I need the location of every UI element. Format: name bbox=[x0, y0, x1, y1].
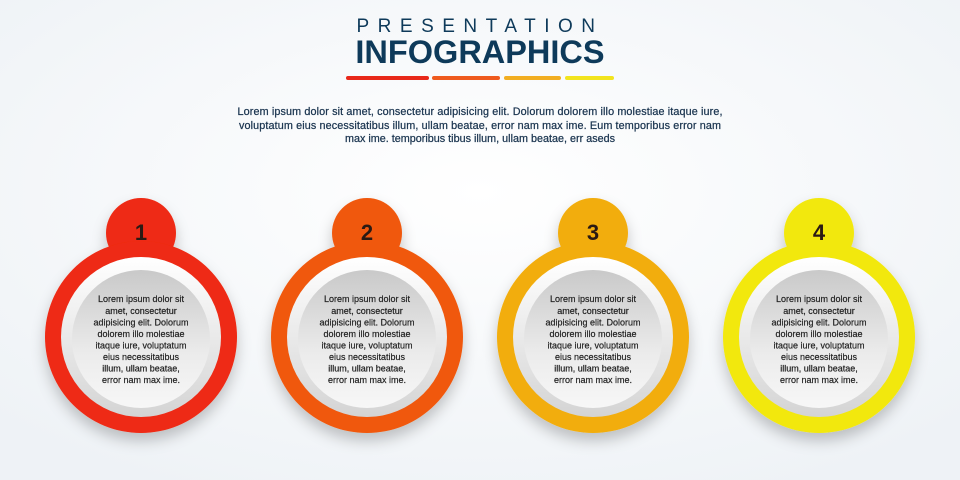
step 3: dolorem illo molestiae bbox=[549, 329, 637, 339]
step 2: illum, ullam beatae, bbox=[328, 364, 406, 374]
step 3: 3 bbox=[587, 220, 599, 245]
step 1: 1 bbox=[135, 220, 147, 245]
step 1: error nam max ime. bbox=[102, 375, 180, 385]
title underline bars bbox=[348, 76, 612, 80]
intro text bbox=[238, 106, 722, 145]
step 1: adipisicing elit. Dolorum bbox=[93, 318, 189, 328]
step 1: eius necessitatibus bbox=[103, 352, 180, 362]
step 4: 4 bbox=[813, 220, 826, 245]
step 1: dolorem illo molestiae bbox=[97, 329, 185, 339]
step 2: 2 bbox=[361, 220, 373, 245]
step 4: eius necessitatibus bbox=[781, 352, 858, 362]
step 1 bbox=[45, 198, 237, 433]
step 4: adipisicing elit. Dolorum bbox=[771, 318, 867, 328]
step 3: illum, ullam beatae, bbox=[554, 364, 632, 374]
step 2: Lorem ipsum dolor sit bbox=[324, 294, 411, 304]
step 2: eius necessitatibus bbox=[329, 352, 406, 362]
step 3: itaque iure, voluptatum bbox=[547, 340, 639, 350]
step 1: amet, consectetur bbox=[105, 306, 177, 316]
step 1: itaque iure, voluptatum bbox=[95, 340, 187, 350]
step 3: adipisicing elit. Dolorum bbox=[545, 318, 641, 328]
step 2: itaque iure, voluptatum bbox=[321, 340, 413, 350]
step 2 bbox=[271, 198, 463, 433]
step 4: amet, consectetur bbox=[783, 306, 855, 316]
title: PRESENTATION bbox=[357, 16, 603, 37]
step 2: error nam max ime. bbox=[328, 375, 406, 385]
step 4: illum, ullam beatae, bbox=[780, 364, 858, 374]
step 3: error nam max ime. bbox=[554, 375, 632, 385]
step 2: dolorem illo molestiae bbox=[323, 329, 411, 339]
step 1: illum, ullam beatae, bbox=[102, 364, 180, 374]
step 4: itaque iure, voluptatum bbox=[773, 340, 865, 350]
step 2: adipisicing elit. Dolorum bbox=[319, 318, 415, 328]
step 4: dolorem illo molestiae bbox=[775, 329, 863, 339]
step 3: Lorem ipsum dolor sit bbox=[550, 294, 637, 304]
intro text: max ime. temporibus tibus illum, ullam beatae, err aseds bbox=[345, 133, 616, 145]
title bbox=[355, 16, 605, 70]
step 4 bbox=[723, 198, 915, 433]
step 3: amet, consectetur bbox=[557, 306, 629, 316]
step 3: eius necessitatibus bbox=[555, 352, 632, 362]
step 4: Lorem ipsum dolor sit bbox=[776, 294, 863, 304]
title: INFOGRAPHICS bbox=[355, 34, 605, 70]
step 2: amet, consectetur bbox=[331, 306, 403, 316]
intro text: Lorem ipsum dolor sit amet, consectetur adipisicing elit. Dolorum dolorem illo molestiae itaque iure, bbox=[238, 106, 722, 118]
intro text: voluptatum eius necessitatibus illum, ullam beatae, error nam max ime. Eum temporibus error nam bbox=[239, 120, 721, 132]
step 1: Lorem ipsum dolor sit bbox=[98, 294, 185, 304]
step 3 bbox=[497, 198, 689, 433]
step 4: error nam max ime. bbox=[780, 375, 858, 385]
